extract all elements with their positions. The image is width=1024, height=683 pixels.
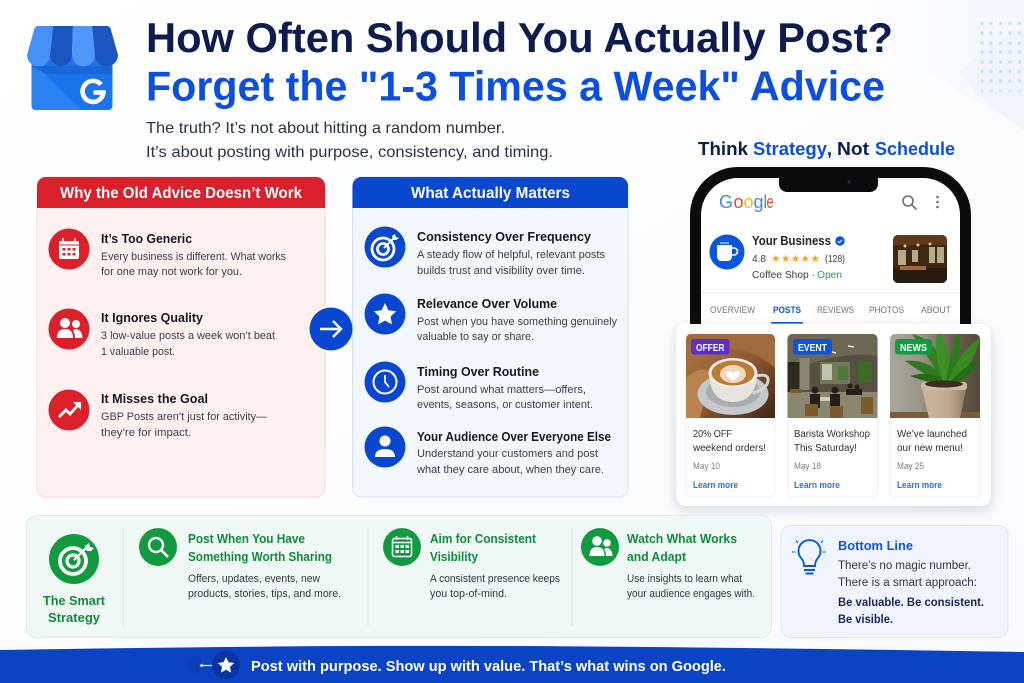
rating: (128) bbox=[825, 253, 845, 265]
panel: what actually matters bbox=[352, 177, 628, 497]
tip: consistent visibility bbox=[383, 528, 560, 600]
panel: why the old advice doesn't work bbox=[37, 177, 325, 497]
badge: news: NEWS bbox=[900, 343, 927, 354]
tabs: OVERVIEW bbox=[710, 305, 755, 316]
heading: think strategy, not schedule: Schedule bbox=[875, 139, 955, 159]
category: Open bbox=[817, 269, 842, 281]
callout text: There is a smart approach: bbox=[838, 577, 977, 589]
panel: the smart strategy bbox=[26, 516, 772, 638]
post text: our new menu! bbox=[897, 443, 963, 454]
title bbox=[146, 14, 893, 110]
category: Coffee Shop · bbox=[752, 269, 815, 281]
google logo: e bbox=[766, 192, 774, 212]
post text: 20% OFF bbox=[693, 429, 732, 440]
phone mockup bbox=[690, 167, 971, 340]
title: Forget the "1-3 Times a Week" Advice bbox=[146, 62, 885, 110]
cafe photo bbox=[893, 235, 947, 283]
item: timing: Timing Over Routine bbox=[417, 364, 539, 379]
icon: light bulb bbox=[792, 540, 826, 574]
google logo: o bbox=[734, 192, 744, 212]
badge: event: EVENT bbox=[798, 343, 827, 354]
item: consistency: A steady flow of helpful, relevant posts bbox=[417, 249, 606, 261]
rating: ★★★★★ bbox=[771, 253, 821, 265]
item: too generic: for one may not work for you. bbox=[101, 266, 242, 278]
badge: news bbox=[895, 339, 932, 354]
post text: Learn more bbox=[794, 480, 840, 491]
tip: watch what works: Use insights to learn what bbox=[627, 573, 742, 585]
item: ignores quality: It Ignores Quality bbox=[101, 310, 204, 325]
verified badge bbox=[835, 236, 845, 246]
post text bbox=[897, 429, 967, 491]
item: timing: events, seasons, or customer intent. bbox=[417, 399, 593, 411]
post text: May 25 bbox=[897, 461, 924, 472]
callout text: There’s no magic number. bbox=[838, 560, 971, 572]
item: too generic bbox=[48, 228, 286, 278]
item: timing: Post around what matters—offers, bbox=[417, 384, 586, 396]
subtitle: The truth? It’s not about hitting a random number. bbox=[146, 120, 505, 137]
callout text: Be visible. bbox=[838, 614, 893, 626]
tabs: POSTS bbox=[773, 305, 801, 316]
subtitle bbox=[146, 120, 553, 161]
post text: Learn more bbox=[693, 480, 738, 491]
post text: weekend orders! bbox=[692, 443, 766, 454]
badge: offer bbox=[691, 339, 730, 354]
subtitle: It’s about posting with purpose, consistency, and timing. bbox=[146, 144, 553, 161]
google logo: G bbox=[719, 192, 733, 212]
item: relevance bbox=[364, 294, 617, 343]
dot grid decoration bbox=[980, 22, 1021, 93]
item: consistency: builds trust and visibility over time. bbox=[417, 265, 585, 277]
post text bbox=[692, 429, 766, 491]
tip: post when worth sharing: Offers, updates, events, new bbox=[188, 573, 320, 585]
arrow between panels bbox=[310, 308, 352, 350]
smart strategy badge: Strategy bbox=[48, 610, 101, 625]
item: timing bbox=[364, 362, 593, 411]
tip: consistent visibility: Aim for Consistent bbox=[430, 531, 537, 546]
tabs: PHOTOS bbox=[869, 305, 904, 316]
tip: consistent visibility: A consistent presence keeps bbox=[430, 573, 560, 585]
google logo: o bbox=[744, 192, 754, 212]
tip: consistent visibility: Visibility bbox=[430, 549, 479, 564]
item: audience: what they care about, when they care. bbox=[416, 464, 604, 476]
tip: post when worth sharing: Post When You Have bbox=[188, 531, 305, 546]
item: misses the goal: GBP Posts aren’t just for activity— bbox=[101, 411, 267, 423]
google logo: l bbox=[764, 192, 767, 212]
panel header bbox=[352, 177, 628, 208]
tip: post when worth sharing: products, stories, tips, and more. bbox=[188, 588, 341, 600]
post text: May 18 bbox=[794, 461, 821, 472]
badge: offer: OFFER bbox=[696, 343, 725, 354]
item: ignores quality: 3 low-value posts a week won’t beat bbox=[101, 330, 275, 342]
rating: 4.8 bbox=[752, 253, 766, 265]
item: audience: Your Audience Over Everyone Else bbox=[417, 429, 611, 444]
callout text: Be valuable. Be consistent. bbox=[838, 597, 984, 609]
footer banner bbox=[0, 646, 1024, 683]
post text: May 10 bbox=[693, 461, 720, 472]
tabs: REVIEWS bbox=[817, 305, 854, 316]
post text: This Saturday! bbox=[794, 443, 857, 454]
callout text bbox=[838, 538, 984, 626]
tabs: ABOUT bbox=[921, 305, 951, 316]
tip: consistent visibility: you top-of-mind. bbox=[430, 588, 507, 600]
tip: watch what works: Watch What Works bbox=[627, 531, 737, 546]
post text: Learn more bbox=[897, 480, 942, 491]
panel: post cards bbox=[676, 324, 991, 506]
item: ignores quality bbox=[48, 308, 275, 358]
smart strategy badge: The Smart bbox=[43, 593, 106, 608]
tip: watch what works bbox=[581, 528, 755, 600]
item: consistency: Consistency Over Frequency bbox=[417, 229, 592, 244]
item: relevance: Post when you have something genuinely bbox=[417, 316, 617, 328]
item: misses the goal bbox=[48, 390, 267, 439]
icon: star with arrow bbox=[187, 651, 240, 679]
icon: search bbox=[903, 196, 916, 210]
item: misses the goal: they’re for impact. bbox=[101, 427, 191, 439]
smart strategy badge bbox=[43, 534, 106, 625]
post card: offer bbox=[685, 334, 775, 497]
item: ignores quality: 1 valuable post. bbox=[101, 346, 175, 358]
post text: Barista Workshop bbox=[794, 429, 870, 440]
google logo: g bbox=[754, 192, 764, 212]
item: audience bbox=[364, 426, 611, 476]
heading: think strategy, not schedule: Not bbox=[837, 139, 869, 159]
panel header bbox=[37, 177, 325, 208]
panel heading: What Actually Matters bbox=[411, 185, 570, 202]
post text: We’ve launched bbox=[897, 429, 967, 440]
tip: post when worth sharing bbox=[139, 528, 341, 600]
post card: news bbox=[890, 328, 980, 497]
badge: event bbox=[793, 339, 832, 354]
tabs bbox=[710, 305, 951, 324]
post text bbox=[794, 429, 870, 491]
icon: menu dots bbox=[936, 196, 939, 208]
item: consistency bbox=[364, 226, 606, 277]
heading: think strategy, not schedule: , bbox=[827, 139, 832, 159]
item: too generic: Every business is different. What works bbox=[101, 251, 286, 263]
tip: watch what works: your audience engages with. bbox=[627, 588, 755, 600]
tip: watch what works: and Adapt bbox=[627, 549, 687, 564]
panel heading: Why the Old Advice Doesn’t Work bbox=[60, 185, 302, 202]
item: relevance: Relevance Over Volume bbox=[417, 296, 557, 311]
tip: post when worth sharing: Something Worth Sharing bbox=[188, 549, 332, 564]
item: relevance: valuable to say or share. bbox=[417, 331, 534, 343]
icon: Google Business storefront bbox=[27, 26, 118, 110]
post card: event bbox=[788, 334, 878, 497]
google logo bbox=[719, 192, 774, 212]
heading: think strategy, not schedule: Think bbox=[698, 139, 749, 159]
footer text: Post with purpose. Show up with value. That’s what wins on Google. bbox=[251, 658, 726, 675]
callout text: Bottom Line bbox=[838, 538, 913, 553]
rating bbox=[752, 253, 845, 265]
heading: think strategy, not schedule: Strategy bbox=[753, 139, 827, 159]
callout: bottom line bbox=[781, 526, 1008, 638]
business logo bbox=[710, 234, 744, 270]
item: audience: Understand your customers and post bbox=[417, 448, 598, 460]
item: too generic: It’s Too Generic bbox=[101, 231, 192, 246]
title: How Often Should You Actually Post? bbox=[146, 14, 893, 61]
business name: Your Business bbox=[752, 234, 831, 248]
heading: think strategy, not schedule bbox=[698, 139, 955, 159]
item: misses the goal: It Misses the Goal bbox=[101, 391, 208, 406]
